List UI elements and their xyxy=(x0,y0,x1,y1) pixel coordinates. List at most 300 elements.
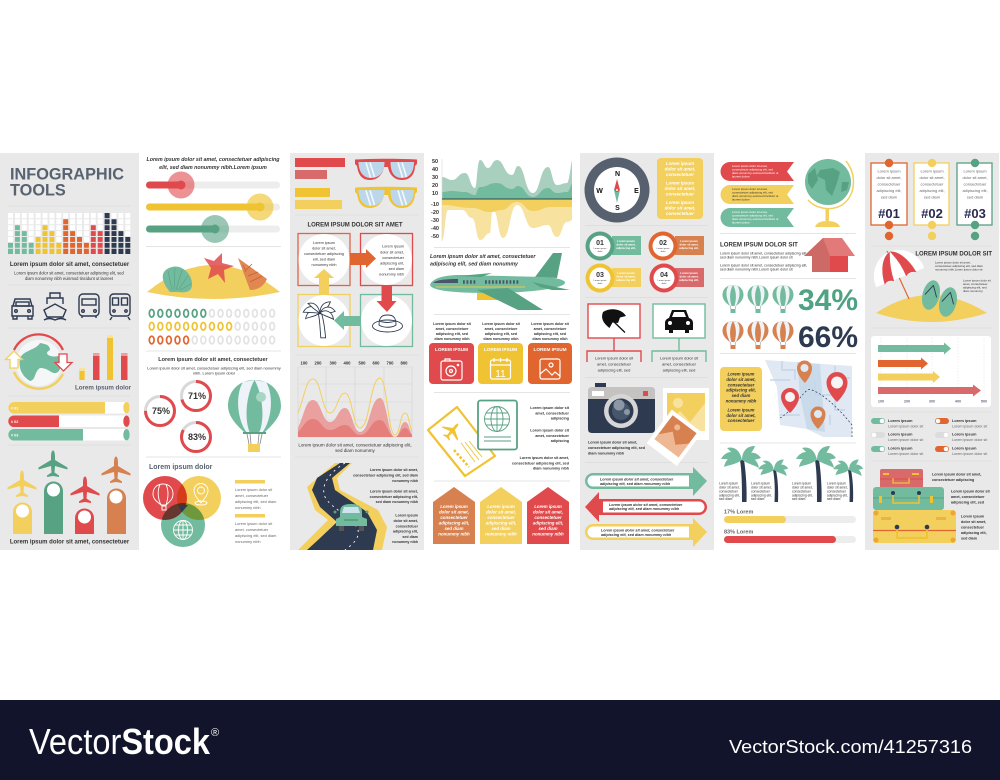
palm captions: adipiscing elit, xyxy=(792,493,813,497)
numbered badges: Lorem ipsum xyxy=(594,280,606,282)
passport text: diam nonummy nibh xyxy=(533,467,570,471)
passport text: adipiscing xyxy=(551,417,569,421)
passport text: adipiscing xyxy=(551,439,569,443)
palm captions: consectetuer xyxy=(719,490,739,494)
ribbons: diam nonummy euismod tincidunt ut xyxy=(732,194,778,198)
yellow note: sed diam xyxy=(732,393,750,398)
road text: nonummy nibh xyxy=(392,479,418,483)
paragraph 2: diam nonummy xyxy=(963,289,983,293)
camera text: consectetuer adipiscing elit, sed xyxy=(588,446,646,450)
suitcase text: sed diam xyxy=(961,536,978,540)
text: step 1: nonummy nibh xyxy=(312,263,336,267)
line chart: 500 xyxy=(358,360,366,366)
arrow: down xyxy=(376,286,396,312)
numbered badges: adipiscing elit, xyxy=(679,278,699,282)
ribbons: laoreet dolore xyxy=(732,221,750,225)
title: INFOGRAPHIC xyxy=(10,166,124,184)
italic text: adipiscing elit, sed diam nonummy xyxy=(430,262,519,268)
legend: adipiscing elit, sed diam xyxy=(235,533,276,538)
progress bars: # 01 xyxy=(11,406,18,410)
icon: bus xyxy=(79,294,99,318)
donut charts xyxy=(146,382,210,452)
globe with arrows xyxy=(6,334,72,389)
house labels: adipiscing elit, xyxy=(439,520,469,526)
house labels: Lorem ipsum xyxy=(487,504,515,509)
passport text: amet, consectetuer xyxy=(535,411,570,415)
legend: Lorem ipsum dolor sit xyxy=(235,487,272,492)
stat: 34%: 34% xyxy=(798,284,858,317)
paragraph: Lorem ipsum dolor sit amet, consectetuer adipiscing elit, xyxy=(720,252,807,256)
yellow text box xyxy=(657,158,703,219)
yellow text box: Lorem ipsum xyxy=(666,180,694,186)
three text columns: adipiscing elit, sed xyxy=(485,332,517,336)
house labels: Lorem ipsum xyxy=(534,504,562,509)
balloon row: teal xyxy=(722,285,794,313)
numbered cards: consectetuer xyxy=(878,182,901,186)
progress: 17%: 17% Lorem xyxy=(724,510,753,516)
ribbons: Lorem ipsum dolor sit amet, xyxy=(732,210,768,214)
arrow banners: adipiscing elit, sed diam nonummy nibh xyxy=(600,482,671,486)
legend: nonummy nibh xyxy=(235,505,261,510)
arrow: right xyxy=(350,249,376,268)
numbered badges: dolor sit amet, xyxy=(616,274,636,278)
legend bars xyxy=(295,158,345,209)
arrow banners: Lorem ipsum dolor sit amet, consectetuer xyxy=(601,528,674,532)
numbered badges: dolor xyxy=(661,250,666,253)
text: step 2: adipiscing elit, xyxy=(380,262,404,266)
palm captions: dolor sit amet, xyxy=(792,486,813,490)
airplane xyxy=(430,253,570,310)
legend: Lorem ipsum dolor sit xyxy=(235,521,272,526)
suitcase text: consectetuer adipiscing xyxy=(932,478,974,482)
panel 6: ribbons, globe, house, balloons, map, palms xyxy=(719,159,863,543)
area chart: 20 xyxy=(432,183,438,189)
numbered cards: consectetuer xyxy=(921,182,944,186)
heading: LOREM IPSUM DOLOR SIT AMET xyxy=(307,222,403,228)
description: nibh. Lorem ipsum dolor xyxy=(193,370,236,376)
numbered cards: adipiscing elit, xyxy=(962,188,988,193)
numbered badges: adipiscing elit, xyxy=(616,278,636,282)
numbered cards: sed diam xyxy=(967,194,984,200)
icon: yellow sunglasses xyxy=(355,187,417,208)
progress: 83% xyxy=(724,530,856,543)
numbered badges: 03 xyxy=(596,272,604,279)
sliders xyxy=(146,172,280,243)
house labels xyxy=(433,487,569,544)
palm captions: sed diam xyxy=(792,497,806,501)
house labels: sed diam xyxy=(444,526,464,531)
house labels: nonummy nibh xyxy=(532,532,564,536)
palm captions: Lorem ipsum xyxy=(719,482,738,486)
palm captions: Lorem ipsum xyxy=(827,482,846,486)
palm captions: sed diam xyxy=(827,497,841,501)
area chart: -50 xyxy=(431,234,439,240)
palm captions: Lorem ipsum xyxy=(792,482,811,486)
ribbons: diam nonummy euismod tincidunt ut xyxy=(732,217,778,221)
paragraph: sed diam nonummy nibh.Lorem ipsum dolor sit xyxy=(720,256,793,260)
yellow text box: consectetuer xyxy=(666,211,694,216)
arrow banners xyxy=(585,467,707,547)
panel 1: infographic tools xyxy=(0,153,139,550)
area chart: -20 xyxy=(431,210,439,216)
bar chart xyxy=(79,335,128,380)
toggles: Lorem ipsum dolor sit xyxy=(952,438,987,442)
three text columns: Lorem ipsum dolor sit xyxy=(531,322,569,326)
area chart: -30 xyxy=(431,218,439,224)
description: Lorem ipsum dolor sit amet, consectetuer adipiscing elit, sed xyxy=(14,270,124,276)
palm captions: adipiscing elit, xyxy=(719,493,740,497)
yellow note: Lorem ipsum xyxy=(728,372,754,376)
yellow text box: dolor sit amet, xyxy=(665,166,695,172)
numbered cards: adipiscing elit, xyxy=(876,188,902,193)
sign: car: adipiscing elit, sed xyxy=(663,368,695,372)
numbered cards: Lorem ipsum xyxy=(963,168,987,174)
arrow banners: adipiscing elit, sed diam nonummy nibh xyxy=(601,533,672,537)
logo: VectorStock xyxy=(29,721,211,762)
line chart: 200 xyxy=(314,360,322,366)
ribbons: Lorem ipsum dolor sit amet, xyxy=(732,164,768,168)
toggles: Lorem ipsum xyxy=(888,432,913,436)
paragraph 1: consectetuer adipiscing elit, sed diam xyxy=(935,264,984,268)
progress bars: # 02 xyxy=(11,420,18,424)
compass: N xyxy=(615,171,620,178)
house labels: Lorem ipsum xyxy=(440,504,468,509)
numbered badges: Lorem ipsum xyxy=(617,271,635,275)
road text: Lorem ipsum xyxy=(395,514,418,518)
donut charts: 71% xyxy=(188,391,206,401)
passport text: Lorem ipsum dolor sit xyxy=(530,428,569,432)
numbered badges: Lorem ipsum xyxy=(617,239,635,243)
road text: dolor sit amet, xyxy=(393,519,418,523)
icon cards xyxy=(429,343,572,384)
icon: calendar: 11 xyxy=(495,369,506,380)
heading: LOREM IPSUM DOLOR SIT xyxy=(720,242,798,248)
toggles: Lorem ipsum xyxy=(952,446,977,450)
house labels: nonummy nibh xyxy=(485,532,517,536)
toggles: Lorem ipsum xyxy=(888,418,913,423)
suitcase text: Lorem ipsum xyxy=(961,514,984,518)
yellow note: Lorem ipsum xyxy=(728,408,755,412)
toggles: Lorem ipsum dolor sit xyxy=(888,424,923,428)
yellow text box: consectetuer xyxy=(666,172,694,177)
suitcase text xyxy=(932,472,990,540)
description: Lorem ipsum dolor sit amet, consectetuer adipiscing elit, sed diam nonummy xyxy=(147,366,281,370)
icon: palm outline xyxy=(303,302,335,338)
sign: umbrella: Lorem ipsum dolor sit xyxy=(595,356,633,360)
numbered badges: dolor sit amet, xyxy=(679,242,699,246)
car xyxy=(334,504,368,531)
photos xyxy=(647,388,709,466)
house labels: adipiscing elit, xyxy=(533,520,563,526)
donut charts: 75% xyxy=(152,406,170,416)
road text: Lorem ipsum dolor sit amet, xyxy=(370,468,418,472)
panel 2: sliders, beach, donuts, venn xyxy=(143,157,281,547)
road text: consectetuer adipiscing elit, xyxy=(370,495,418,499)
three text columns: Lorem ipsum dolor sit xyxy=(482,322,520,326)
flow diagram xyxy=(298,234,412,346)
ribbons: Lorem ipsum dolor sit amet, xyxy=(732,187,768,191)
arrow bar chart: 200 xyxy=(904,400,910,404)
palm captions: adipiscing elit, xyxy=(827,493,848,497)
suitcase text: dolor sit amet, xyxy=(961,520,986,524)
three text columns: amet, consectetuer xyxy=(485,327,518,331)
numbered cards: Lorem ipsum xyxy=(877,168,901,174)
suitcase text: Lorem ipsum dolor sit amet, xyxy=(932,472,981,476)
numbered cards: sed diam xyxy=(881,194,898,200)
chart caption: Lorem ipsum dolor sit amet, consectetuer adipiscing elit, xyxy=(298,442,412,448)
numbered badges xyxy=(586,232,704,292)
three text columns: diam nonummy nibh xyxy=(483,337,519,341)
area chart: 50 xyxy=(432,159,438,165)
suitcase text: consectetuer xyxy=(961,526,985,530)
palm captions: consectetuer xyxy=(792,490,812,494)
legend: nonummy nibh xyxy=(235,539,261,544)
ribbons xyxy=(720,162,794,227)
text: step 2: consectetuer xyxy=(382,256,405,260)
palm captions xyxy=(719,482,848,501)
yellow note: adipiscing elit, xyxy=(726,388,756,392)
numbered badges: adipiscing elit, xyxy=(679,246,699,250)
numbered badges: dolor xyxy=(598,250,603,253)
palm trees xyxy=(721,446,863,502)
arrow banners: adipiscing elit, sed diam nonummy nibh xyxy=(609,507,680,511)
legend: adipiscing elit, sed diam xyxy=(235,499,276,504)
numbered cards: Lorem ipsum xyxy=(920,168,944,174)
three text columns: Lorem ipsum dolor sit xyxy=(433,322,471,326)
line chart: 300 xyxy=(330,360,337,366)
beach with umbrella and flip-flops xyxy=(866,242,987,322)
house labels: consectetuer xyxy=(440,515,468,520)
camera text: Lorem ipsum dolor sit amet, xyxy=(588,440,637,444)
icon cards: LOREM IPSUM xyxy=(484,347,517,352)
yellow note: consectetuer xyxy=(728,418,755,423)
numbered cards: adipiscing elit, xyxy=(919,188,945,193)
paragraph 2: amet, consectetuer xyxy=(963,282,988,286)
boarding pass xyxy=(428,407,495,476)
passport text: amet, consectetuer xyxy=(535,434,570,438)
line chart: 400 xyxy=(344,360,351,366)
sign: umbrella: adipiscing elit, sed xyxy=(598,368,630,372)
yellow note: dolor sit amet, xyxy=(726,413,756,418)
road text: adipiscing elit, xyxy=(393,530,418,534)
house labels: nonummy nibh xyxy=(438,532,470,536)
arrow bar chart xyxy=(871,336,991,407)
numbered cards: consectetuer xyxy=(964,182,987,186)
three text columns: adipiscing elit, sed xyxy=(534,332,566,336)
panel 3: sunglasses, flow, line chart, road xyxy=(290,153,424,550)
footer bar xyxy=(0,700,1000,780)
toggles: Lorem ipsum dolor sit xyxy=(952,424,987,428)
area chart xyxy=(431,159,572,241)
numbered badges: dolor sit amet, xyxy=(616,242,636,246)
plane pins xyxy=(8,450,130,534)
three text columns: amet, consectetuer xyxy=(436,327,469,331)
paragraph 1: Lorem ipsum dolor sit amet, xyxy=(935,260,971,264)
paragraph 1: nonummy nibh.Lorem ipsum dolor sit xyxy=(935,268,983,272)
ribbons: laoreet dolore xyxy=(732,175,750,179)
yellow note: dolor sit amet, xyxy=(726,377,756,382)
beach with shells xyxy=(147,253,280,299)
panel 7: cards, beach, chart, toggles, suitcases xyxy=(865,153,999,550)
toggles xyxy=(871,418,987,456)
icon: train xyxy=(110,294,130,320)
icon: ship xyxy=(44,293,66,320)
passport text: Lorem ipsum dolor sit xyxy=(530,406,569,410)
camera xyxy=(588,383,655,433)
text: step 1: elit, sed diam xyxy=(313,258,335,262)
house labels: dolor sit amet, xyxy=(439,510,469,514)
title: TOOLS xyxy=(10,182,66,200)
palm captions: sed diam xyxy=(719,497,733,501)
suitcase text: amet, consectetuer xyxy=(951,495,985,499)
line chart xyxy=(298,360,412,437)
ribbons: laoreet dolore xyxy=(732,198,750,202)
text: step 2: Lorem ipsum xyxy=(382,244,404,248)
line chart: 600 xyxy=(372,360,380,366)
text: step 1: consectetuer adipiscing xyxy=(304,252,344,256)
area chart: 10 xyxy=(432,191,438,197)
road text: nonummy nibh xyxy=(392,540,418,544)
footer caption: Lorem ipsum dolor sit amet, consectetuer xyxy=(10,540,130,546)
text: step 1: Lorem ipsum xyxy=(313,241,335,245)
sign: car xyxy=(652,304,706,372)
passport xyxy=(478,400,517,450)
panel 4: area chart, plane, cards, passport, houses xyxy=(428,159,572,544)
sign: umbrella xyxy=(587,304,641,372)
text: step 2: dolor sit amet, xyxy=(380,250,404,254)
numbered cards: dolor sit amet, xyxy=(962,175,988,180)
icon: hat outline xyxy=(372,315,402,332)
icon: globe xyxy=(174,520,192,540)
line chart: 100 xyxy=(300,360,308,366)
icon cards: LOREM IPSUM xyxy=(533,347,567,352)
paragraph: Lorem ipsum dolor sit amet, consectetuer adipiscing elit, xyxy=(720,264,807,268)
sign: car: Lorem ipsum dolor sit xyxy=(660,356,698,360)
area chart: 30 xyxy=(432,175,438,181)
toggles: Lorem ipsum dolor sit xyxy=(952,452,987,456)
progress: 17% xyxy=(724,510,856,523)
sign: umbrella: amet, consectetuer xyxy=(597,362,632,366)
suitcase text: adipiscing elit, xyxy=(961,531,987,535)
description: diam nonummy nibh euismod tincidunt ut laoreet xyxy=(25,276,114,281)
house labels: sed diam xyxy=(538,526,558,531)
text: step 1: dolor sit amet, xyxy=(312,247,336,251)
numbered badges: dolor xyxy=(598,282,603,285)
road text: consectetuer adipiscing elit, sed diam xyxy=(353,474,418,478)
map with pins xyxy=(765,360,852,437)
italic text: Lorem ipsum dolor sit amet, consectetuer xyxy=(430,254,535,260)
compass: E xyxy=(634,188,639,195)
registered mark: ® xyxy=(211,727,219,739)
area chart: -10 xyxy=(431,202,439,208)
yellow text box: Lorem ipsum xyxy=(666,161,694,166)
text: step 2: sed diam xyxy=(389,267,404,271)
venn diagram xyxy=(143,476,221,547)
yellow note: nonummy nibh xyxy=(726,398,757,404)
area chart: -40 xyxy=(431,226,439,232)
legend xyxy=(235,480,276,544)
arrow bar chart: 400 xyxy=(955,400,961,404)
road text: sed diam nonummy nibh xyxy=(376,500,418,504)
numbered cards: dolor sit amet, xyxy=(876,175,902,180)
numbered badges: Lorem ipsum xyxy=(680,239,698,243)
compass xyxy=(584,158,650,222)
palm captions: consectetuer xyxy=(751,490,771,494)
progress: 83%: 83% Lorem xyxy=(724,530,753,536)
yellow text box: dolor sit amet, xyxy=(665,206,695,210)
three text columns xyxy=(433,322,570,341)
numbered badges: 02 xyxy=(659,240,667,247)
toggles: Lorem ipsum xyxy=(952,432,977,436)
three text columns: diam nonummy nibh xyxy=(532,337,568,341)
legend: amet, consectetuer xyxy=(235,493,269,498)
icon: calendar xyxy=(490,358,510,380)
house labels: dolor sit amet, xyxy=(533,510,563,514)
numbered badges: dolor xyxy=(662,282,667,285)
road text xyxy=(353,468,419,544)
panel 5: compass, badges, signs, camera, arrows xyxy=(580,153,714,550)
image id: VectorStock.com/41257316 xyxy=(729,737,972,757)
heading: Lorem ipsum dolor sit amet, consectetuer xyxy=(158,357,269,363)
suitcase text: Lorem ipsum dolor sit xyxy=(951,490,990,494)
chart label: Lorem ipsum dolor xyxy=(75,384,132,392)
text: step 2: nonummy nibh xyxy=(379,272,404,276)
palm captions: dolor sit amet, xyxy=(719,486,740,490)
numbered cards: sed diam xyxy=(924,194,941,200)
yellow note xyxy=(720,367,762,431)
line chart: 800 xyxy=(400,360,408,366)
numbered cards: dolor sit amet, xyxy=(919,175,945,180)
palm captions: adipiscing elit, xyxy=(751,493,772,497)
arrow: left xyxy=(334,311,360,330)
passport text: consectetuer adipiscing elit, sed xyxy=(512,461,570,465)
icon: red sunglasses xyxy=(355,159,417,180)
numbered badges: Lorem ipsum xyxy=(658,280,670,282)
progress bars: # 03 xyxy=(11,433,18,437)
ribbons: diam nonummy euismod tincidunt ut xyxy=(732,171,778,175)
passport text: Lorem ipsum dolor sit amet, xyxy=(520,456,569,460)
icon cards: LOREM IPSUM xyxy=(435,347,468,352)
palm captions: dolor sit amet, xyxy=(751,486,772,490)
house labels: adipiscing elit, xyxy=(486,520,516,526)
icon: camera xyxy=(441,359,462,380)
numbered cards: #01 xyxy=(878,206,900,221)
house labels: consectetuer xyxy=(534,515,562,520)
heading: LOREM IPSUM DOLOR SIT xyxy=(915,252,992,258)
desk globe xyxy=(805,159,853,227)
equalizer chart xyxy=(8,213,131,254)
line chart: 700 xyxy=(386,360,394,366)
icon: house xyxy=(804,238,855,272)
yellow note: consectetuer xyxy=(728,382,755,388)
numbered badges: adipiscing elit, xyxy=(616,246,636,250)
compass: W xyxy=(596,188,603,195)
numbered badges: 04 xyxy=(660,272,668,279)
numbered badges: Lorem ipsum xyxy=(680,271,698,275)
legend: amet, consectetuer xyxy=(235,527,269,532)
numbered cards: #03 xyxy=(964,206,986,221)
oval progress rows xyxy=(149,310,274,344)
arrow bar chart: 100 xyxy=(878,400,884,404)
numbered badges: dolor sit amet, xyxy=(679,274,699,278)
paragraph: sed diam nonummy nibh.Lorem ipsum dolor sit xyxy=(720,268,793,272)
paragraph 2: Lorem ipsum dolor sit xyxy=(963,278,991,282)
toggles: Lorem ipsum dolor sit xyxy=(888,452,923,456)
palm captions: dolor sit amet, xyxy=(827,486,848,490)
road text: consectetuer xyxy=(396,524,419,528)
icon: image xyxy=(540,359,560,379)
section heading: Lorem ipsum dolor xyxy=(149,464,213,471)
